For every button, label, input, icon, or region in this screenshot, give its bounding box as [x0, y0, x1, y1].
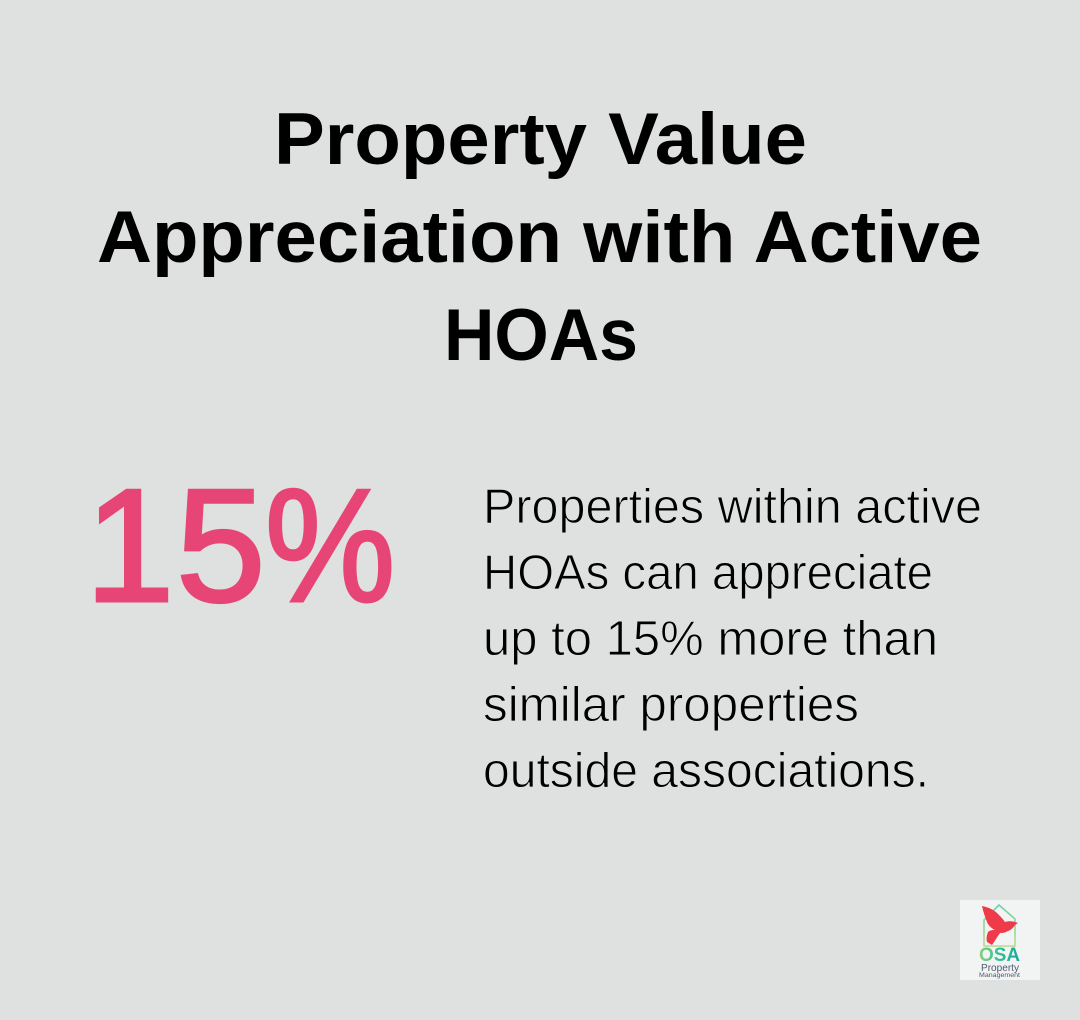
title: Property Value	[274, 99, 807, 180]
logo wordmark OSA: OSA	[979, 945, 1020, 966]
description text: HOAs can appreciate	[483, 546, 933, 600]
icon: house outline	[984, 905, 1015, 946]
title	[97, 99, 982, 376]
big statistic: 15%: 5	[176, 456, 266, 636]
description text: outside associations.	[483, 744, 929, 798]
logo: OSA Property Management	[960, 900, 1040, 980]
logo text Management: Management	[979, 972, 1020, 979]
description text: up to 15% more than	[483, 612, 938, 666]
description text: similar properties	[483, 678, 859, 732]
big statistic: 15%	[85, 456, 395, 636]
big statistic: 15%: %	[265, 456, 395, 636]
description text: Properties within active	[483, 480, 982, 534]
big statistic: 15%: 1	[85, 456, 175, 636]
title: Appreciation with Active	[97, 197, 982, 278]
icon: red bird	[982, 906, 1018, 945]
logo text Property: Property	[981, 963, 1019, 974]
title: HOAs	[444, 295, 638, 376]
description text	[483, 480, 982, 798]
